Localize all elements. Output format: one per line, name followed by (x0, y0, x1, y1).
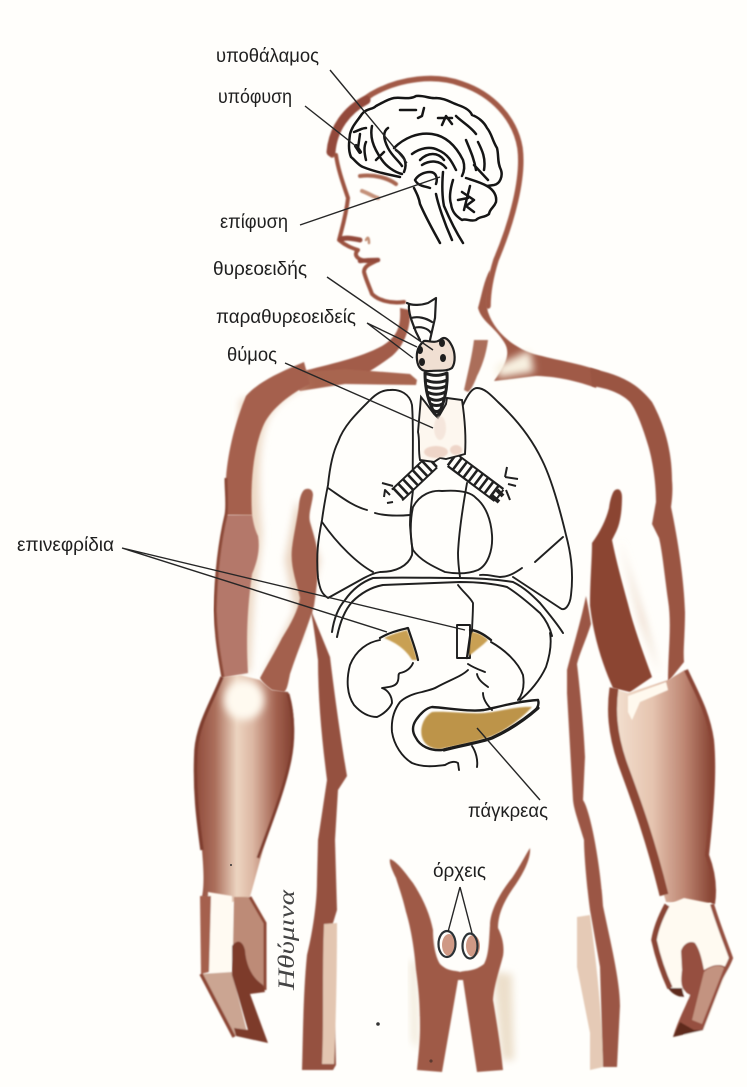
label: pineal: επίφυση (220, 211, 288, 233)
testes (438, 931, 480, 958)
lung fissures (322, 488, 563, 577)
label: thymus: θύμος (227, 344, 277, 366)
right shoulder and upper arm (590, 368, 685, 682)
brain stem (414, 172, 463, 243)
label: adrenals: επινεφρίδια (17, 534, 114, 556)
right adrenal gland (467, 630, 491, 658)
mediastinal line (458, 483, 473, 633)
leader: adrenals (122, 548, 465, 632)
left hand (200, 892, 268, 1043)
label: thyroid: θυρεοειδής (213, 258, 307, 280)
right torso side line (567, 596, 620, 1070)
right lung (463, 388, 572, 609)
left forearm (195, 675, 294, 905)
larynx and trachea (407, 298, 455, 417)
stomach curve (520, 633, 551, 700)
left kidney (348, 640, 413, 717)
leader: thymus (285, 363, 433, 428)
label: testes: όρχεις (433, 860, 486, 882)
right inner arm (590, 489, 660, 692)
left lung (317, 390, 413, 598)
pelvis and legs (390, 848, 530, 1072)
print specks (230, 864, 433, 1063)
right hand (654, 898, 732, 1037)
neck, trapezius and shoulders (292, 270, 600, 392)
label: pituitary: υπόφυση (218, 86, 292, 108)
left adrenal gland (380, 628, 418, 660)
cerebellum (450, 178, 496, 221)
thymus (418, 397, 465, 462)
left upper arm (215, 362, 310, 678)
adrenal glands, kidneys and pancreas (348, 625, 551, 770)
artist signature: Ηθύμινα (274, 889, 299, 991)
head and face outline (331, 79, 521, 306)
brain (349, 96, 502, 243)
gyri (354, 108, 488, 180)
thyroid and parathyroid glands (417, 338, 455, 371)
body silhouette: brown watercolor shading (195, 79, 732, 1072)
left inner arm (260, 489, 320, 692)
diaphragm (332, 578, 563, 633)
bronchi: ladder rings (382, 459, 518, 503)
cerebrum outline (349, 96, 502, 186)
right kidney (468, 642, 524, 710)
pancreas (413, 700, 539, 767)
label: parathyroids: παραθυρεοειδείς (216, 306, 356, 328)
duodenum (392, 670, 468, 770)
corpus callosum (394, 134, 464, 176)
leader lines (122, 70, 540, 933)
label: pancreas: πάγκρεας (468, 800, 548, 822)
leader: testes (448, 887, 472, 933)
lungs and internal organs (317, 388, 572, 637)
leader: pineal (300, 177, 440, 225)
leader: pituitary (305, 106, 357, 147)
label: hypothalamus: υποθάλαμος (216, 45, 319, 67)
heart (411, 491, 492, 573)
right adrenal capsule (457, 625, 470, 658)
leader: pancreas (477, 728, 540, 800)
trachea rings (425, 373, 447, 417)
left torso side line (302, 608, 347, 1070)
leader: hypothalamus (330, 70, 407, 163)
leader: parathyroids (367, 323, 417, 358)
right forearm (612, 670, 714, 904)
leader: thyroid (327, 277, 433, 350)
